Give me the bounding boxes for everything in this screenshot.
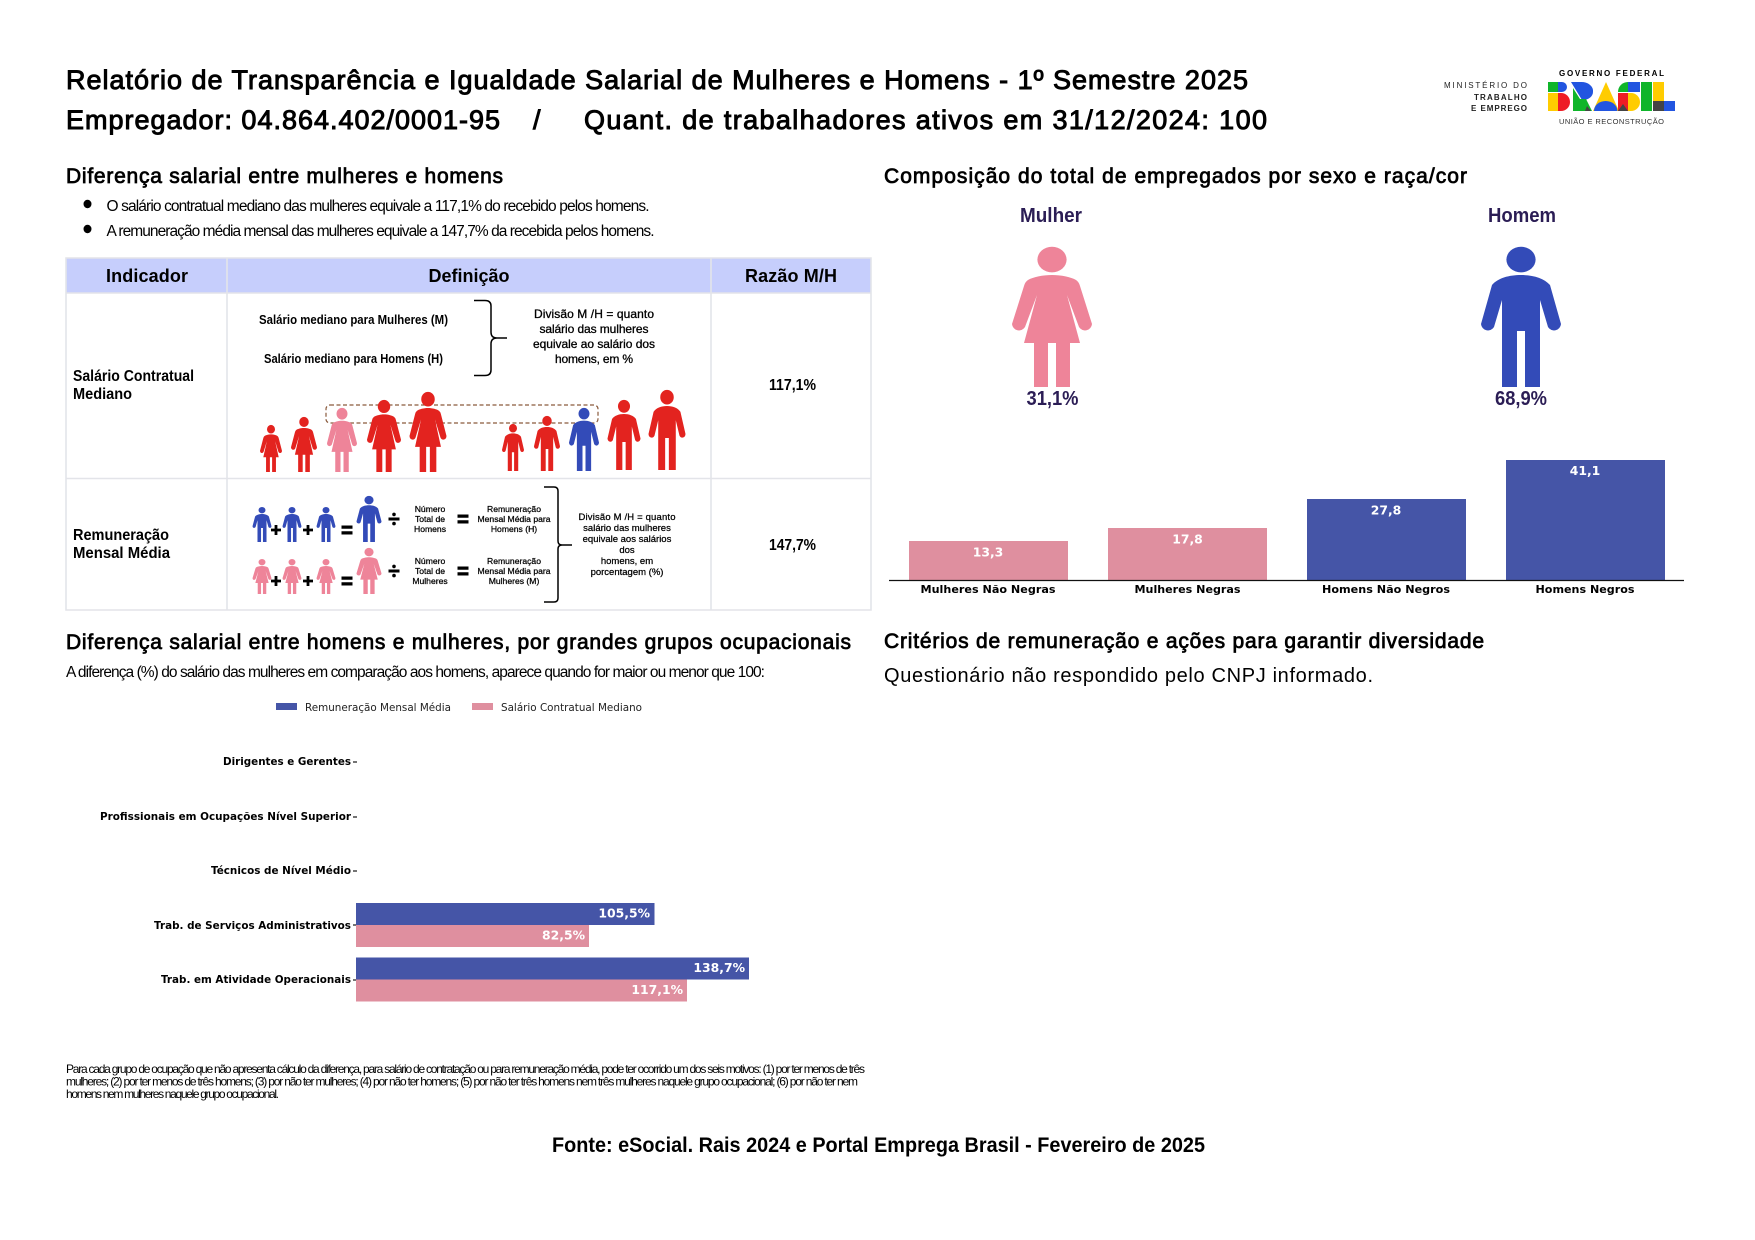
title: Empregador: 04.864.402/0001-95 <box>66 105 500 135</box>
subtitle: grupos ocupacionais: A diferença (%) do salário das mulheres em comparação aos homens, aparece quando for maior ou menor que 100: <box>66 664 765 681</box>
row: salário contratual mediano: Salário mediano para Homens (H) <box>264 352 443 366</box>
icon: woman <box>1012 247 1092 387</box>
bullet list <box>84 198 655 240</box>
bars: serviços administrativos <box>356 903 654 947</box>
definition text: salário das mulheres <box>540 322 648 336</box>
row: remuneração mensal média <box>73 487 816 602</box>
definition text: dos <box>619 545 635 556</box>
text: men equation <box>414 504 551 534</box>
bar chart: composição por sexo e raça: Mulheres Negras <box>1134 583 1241 596</box>
definition text: Divisão M /H = quanto <box>578 512 676 523</box>
text: women equation: Mulheres (M) <box>489 576 539 586</box>
footnote: homens nem mulheres naquele grupo ocupacional. <box>66 1087 279 1101</box>
category labels: Técnicos de Nível Médio <box>211 864 351 877</box>
legend: Remuneração Mensal Média <box>305 702 451 714</box>
panel: mulher: 31,1% <box>1026 388 1079 410</box>
definition text: equivale aos salários <box>583 534 672 545</box>
logo: Ministério do Trabalho e Emprego, Governo Federal <box>1444 69 1675 126</box>
icon: man <box>1481 247 1561 387</box>
legend <box>276 702 642 714</box>
definition text <box>533 307 655 366</box>
title: Quant. de trabalhadores ativos em 31/12/2024: 100 <box>584 105 1267 135</box>
legend: Salário Contratual Mediano <box>501 702 642 714</box>
category labels: Trab. de Serviços Administrativos <box>154 919 351 932</box>
bar chart: composição por sexo e raça: 41,1 <box>1570 463 1600 478</box>
definition text: equivale ao salário dos <box>533 337 655 351</box>
text: men equation: Remuneração <box>487 504 541 514</box>
table header: Definição <box>428 266 510 286</box>
brace <box>544 487 572 602</box>
panel: homem <box>1481 205 1561 410</box>
icons: men equation <box>252 496 468 542</box>
logo: Ministério do Trabalho e Emprego, Governo Federal: UNIÃO E RECONSTRUÇÃO <box>1559 117 1664 126</box>
bar chart: composição por sexo e raça: Homens Negros <box>1536 583 1635 596</box>
row: salário contratual mediano: Salário Contratual <box>73 368 194 385</box>
row: salário contratual mediano: 117,1% <box>769 377 816 394</box>
category labels: Dirigentes e Gerentes <box>223 755 351 768</box>
definition text: Divisão M /H = quanto <box>534 307 654 321</box>
text: men equation: Homens <box>414 524 446 534</box>
table header: Indicador <box>106 266 188 286</box>
text: women equation: Remuneração <box>487 556 541 566</box>
row: salário contratual mediano: Salário mediano para Mulheres (M) <box>259 313 448 327</box>
panel: mulher <box>1012 205 1092 410</box>
source line: Fonte: eSocial. Rais 2024 e Portal Emprega Brasil - Fevereiro de 2025 <box>552 1133 1205 1157</box>
definition text: homens, em <box>601 556 653 567</box>
heading: diferença salarial: Diferença salarial entre mulheres e homens <box>66 165 503 188</box>
text: men equation: Homens (H) <box>491 524 537 534</box>
category labels: Profissionais em Ocupações Nível Superior <box>100 810 352 823</box>
logo: Ministério do Trabalho e Emprego, Governo Federal: TRABALHO <box>1474 93 1527 102</box>
row: remuneração mensal média: 147,7% <box>769 537 816 554</box>
definition text <box>578 512 676 578</box>
icons: men ranked <box>502 390 686 471</box>
footnote: mulheres; (2) por ter menos de três homens; (3) por não ter mulheres; (4) por não ter homens; (5) por não ter três homens nem três mulheres naquele grupo ocupacional; (6) por não ter nem <box>66 1074 858 1088</box>
bars: serviços administrativos: 82,5% <box>542 928 586 942</box>
icons: women ranked <box>260 392 446 472</box>
bar chart: composição por sexo e raça: 17,8 <box>1172 532 1203 546</box>
table: indicadores <box>66 258 871 610</box>
text: women equation: Mulheres <box>412 576 448 586</box>
panel: homem: Homem <box>1488 205 1556 227</box>
text: men equation: Número <box>415 504 445 514</box>
title <box>66 65 1267 135</box>
definition text: homens, em % <box>555 352 633 366</box>
bar chart: composição por sexo e raça: Mulheres Não Negras <box>920 583 1056 596</box>
heading: composição: Composição do total de empregados por sexo e raça/cor <box>884 165 1467 188</box>
bullet list: O salário contratual mediano das mulheres equivale a 117,1% do recebido pelos homens. <box>106 198 650 215</box>
text: men equation: Total de <box>415 514 445 524</box>
bar chart: grupos ocupacionais <box>100 755 749 1002</box>
logo: Ministério do Trabalho e Emprego, Governo Federal: E EMPREGO <box>1471 104 1527 113</box>
text: women equation: Mensal Média para <box>478 566 551 576</box>
bars: atividade operacional: 117,1% <box>631 982 684 997</box>
row: remuneração mensal média: Remuneração <box>73 527 169 544</box>
bar chart: composição por sexo e raça: Homens Não Negros <box>1322 583 1450 596</box>
panel: homem: 68,9% <box>1495 388 1547 410</box>
definition text: salário das mulheres <box>583 523 671 534</box>
table header: Razão M/H <box>745 266 837 286</box>
icons: women equation <box>252 548 468 594</box>
category labels <box>100 755 357 986</box>
bullet list: A remuneração média mensal das mulheres equivale a 147,7% da recebida pelos homens. <box>106 223 655 240</box>
brace <box>474 300 507 376</box>
text: men equation: Mensal Média para <box>478 514 551 524</box>
definition text: porcentagem (%) <box>591 567 663 578</box>
panel: mulher: Mulher <box>1020 205 1082 227</box>
footnote <box>66 1062 865 1101</box>
row: remuneração mensal média: Mensal Média <box>73 545 170 562</box>
logo: Ministério do Trabalho e Emprego, Governo Federal: MINISTÉRIO DO <box>1444 81 1527 90</box>
text: women equation <box>412 556 551 586</box>
bars: atividade operacional <box>356 958 749 1002</box>
text: questionário: Questionário não respondido pelo CNPJ informado. <box>884 665 1373 687</box>
row: salário contratual mediano <box>73 300 816 472</box>
bars: serviços administrativos: 105,5% <box>598 906 651 920</box>
row: salário contratual mediano: Mediano <box>73 386 132 403</box>
bars: atividade operacional: 138,7% <box>693 960 746 975</box>
bar chart: composição por sexo e raça: 27,8 <box>1371 502 1401 518</box>
heading: grupos ocupacionais: Diferença salarial entre homens e mulheres, por grandes grupos ocupacionais <box>66 631 851 654</box>
text: women equation: Número <box>415 556 445 566</box>
dashed median box <box>326 405 598 423</box>
category labels: Trab. em Atividade Operacionais <box>161 973 351 986</box>
logo: Ministério do Trabalho e Emprego, Governo Federal: GOVERNO FEDERAL <box>1559 69 1664 78</box>
bar chart: composição por sexo e raça <box>889 460 1684 596</box>
text: women equation: Total de <box>415 566 445 576</box>
footnote: Para cada grupo de ocupação que não apresenta cálculo da diferença, para salário de contratação ou para remuneração média, pode ter ocorrido um dos seis motivos: (1) por ter menos de três <box>66 1062 865 1076</box>
heading: critérios: Critérios de remuneração e ações para garantir diversidade <box>884 630 1484 653</box>
table header <box>66 258 871 293</box>
title: Relatório de Transparência e Igualdade Salarial de Mulheres e Homens - 1º Semestre 2025 <box>66 65 1248 95</box>
bar chart: composição por sexo e raça: 13,3 <box>973 544 1003 560</box>
title: / <box>533 105 541 135</box>
